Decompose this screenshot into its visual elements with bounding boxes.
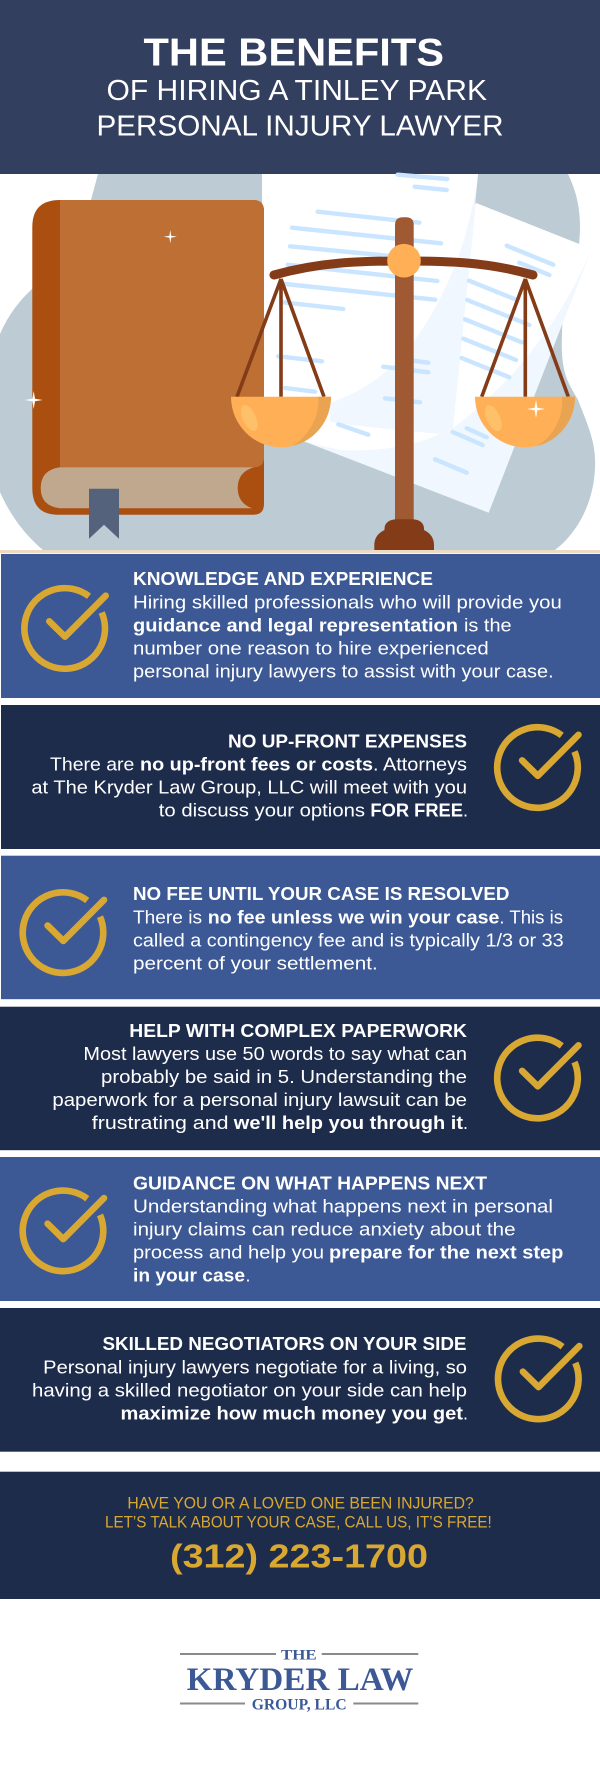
body text: percent of your settlement. — [133, 953, 378, 973]
body text: paperwork for a personal injury lawsuit can be — [52, 1090, 467, 1110]
body text: Hiring skilled professionals who will provide you — [133, 592, 562, 612]
body text: having a skilled negotiator on your side can help — [32, 1380, 467, 1400]
title: PERSONAL INJURY LAWYER — [96, 111, 504, 143]
header banner — [0, 0, 600, 174]
floor strip — [0, 550, 600, 553]
body text: injury claims can reduce anxiety about the — [133, 1219, 516, 1239]
body text: . Attorneys — [373, 754, 467, 774]
body text: There is — [133, 907, 202, 927]
documents — [262, 174, 592, 513]
check icon — [497, 1038, 578, 1118]
check icon — [498, 1339, 579, 1419]
body text: frustrating and — [92, 1113, 228, 1133]
body text: There are — [50, 754, 134, 774]
body text: to discuss your options — [159, 800, 365, 820]
heading: KNOWLEDGE AND EXPERIENCE — [133, 569, 433, 589]
call to action text: LET’S TALK ABOUT YOUR CASE, CALL US, IT’S FREE! — [105, 1514, 492, 1532]
logo: The Kryder Law Group, LLC: GROUP, LLC — [252, 1696, 347, 1713]
panel: no fee until resolved — [1, 856, 600, 999]
body text — [52, 1044, 468, 1133]
body text: personal injury lawyers to assist with your case. — [133, 661, 554, 681]
body text: we'll help you through it — [233, 1113, 463, 1133]
check icon — [23, 892, 104, 973]
body text: no up-front fees or costs — [140, 754, 373, 774]
post — [395, 217, 414, 522]
logo: The Kryder Law Group, LLC: THE — [281, 1647, 317, 1663]
body text: number one reason to hire experienced — [133, 638, 489, 658]
heading: NO FEE UNTIL YOUR CASE IS RESOLVED — [133, 884, 509, 904]
body text: probably be said in 5. Understanding the — [101, 1067, 467, 1087]
check icon — [24, 588, 106, 669]
title: THE BENEFITS — [144, 31, 444, 74]
call to action banner — [0, 1472, 600, 1599]
right pan — [475, 397, 575, 447]
call to action text — [105, 1495, 492, 1532]
check icon — [497, 727, 578, 808]
phone number: (312) 223-1700 — [170, 1537, 428, 1574]
body text: FOR FREE — [370, 800, 463, 820]
body text: at The Kryder Law Group, LLC will meet with you — [31, 777, 467, 797]
heading: SKILLED NEGOTIATORS ON YOUR SIDE — [102, 1334, 466, 1354]
base — [374, 519, 434, 550]
hub — [387, 244, 421, 278]
body text — [133, 1196, 563, 1285]
law book — [32, 200, 264, 539]
body text: guidance and legal representation — [133, 615, 458, 635]
body text — [133, 592, 562, 681]
panel: skilled negotiators — [0, 1308, 600, 1452]
illustration: book, scales and documents — [0, 174, 600, 553]
body text: . This is — [499, 907, 563, 927]
body text: called a contingency fee and is typically 1/3 or 33 — [133, 930, 564, 950]
beam — [274, 261, 533, 275]
body text: is the — [464, 615, 512, 635]
body text: process and help you — [133, 1242, 324, 1262]
heading: NO UP-FRONT EXPENSES — [228, 731, 467, 751]
body text: in your case — [133, 1265, 245, 1285]
heading: GUIDANCE ON WHAT HAPPENS NEXT — [133, 1173, 487, 1193]
strings — [237, 279, 568, 397]
body text: Most lawyers use 50 words to say what can — [83, 1044, 467, 1064]
left pan — [231, 397, 331, 447]
sparkles — [25, 230, 545, 418]
panel: knowledge and experience — [1, 554, 600, 698]
scales of justice — [231, 217, 575, 550]
panel: no up-front expenses — [1, 705, 600, 849]
body text: maximize how much money you get — [120, 1403, 463, 1423]
body text — [32, 1357, 468, 1423]
title — [96, 31, 504, 143]
body text — [31, 754, 468, 820]
body text: . — [463, 1403, 468, 1423]
body text: Understanding what happens next in personal — [133, 1196, 553, 1216]
logo: The Kryder Law Group, LLC: KRYDER LAW — [187, 1662, 413, 1698]
call to action text: HAVE YOU OR A LOVED ONE BEEN INJURED? — [127, 1495, 474, 1513]
body text: . — [463, 1113, 468, 1133]
body text — [133, 907, 564, 973]
title: OF HIRING A TINLEY PARK — [106, 75, 488, 107]
body text: no fee unless we win your case — [208, 907, 499, 927]
bookmark — [89, 489, 119, 539]
body text: prepare for the next step — [329, 1242, 563, 1262]
background blob — [0, 174, 595, 550]
body text: . — [463, 800, 468, 820]
heading: HELP WITH COMPLEX PAPERWORK — [129, 1021, 467, 1041]
body text: . — [246, 1265, 251, 1285]
panel: help with complex paperwork — [0, 1007, 600, 1150]
check icon — [23, 1191, 104, 1271]
logo: The Kryder Law Group, LLC — [180, 1647, 418, 1713]
panel: guidance on what happens next — [0, 1157, 600, 1301]
body text: Personal injury lawyers negotiate for a living, so — [43, 1357, 467, 1377]
